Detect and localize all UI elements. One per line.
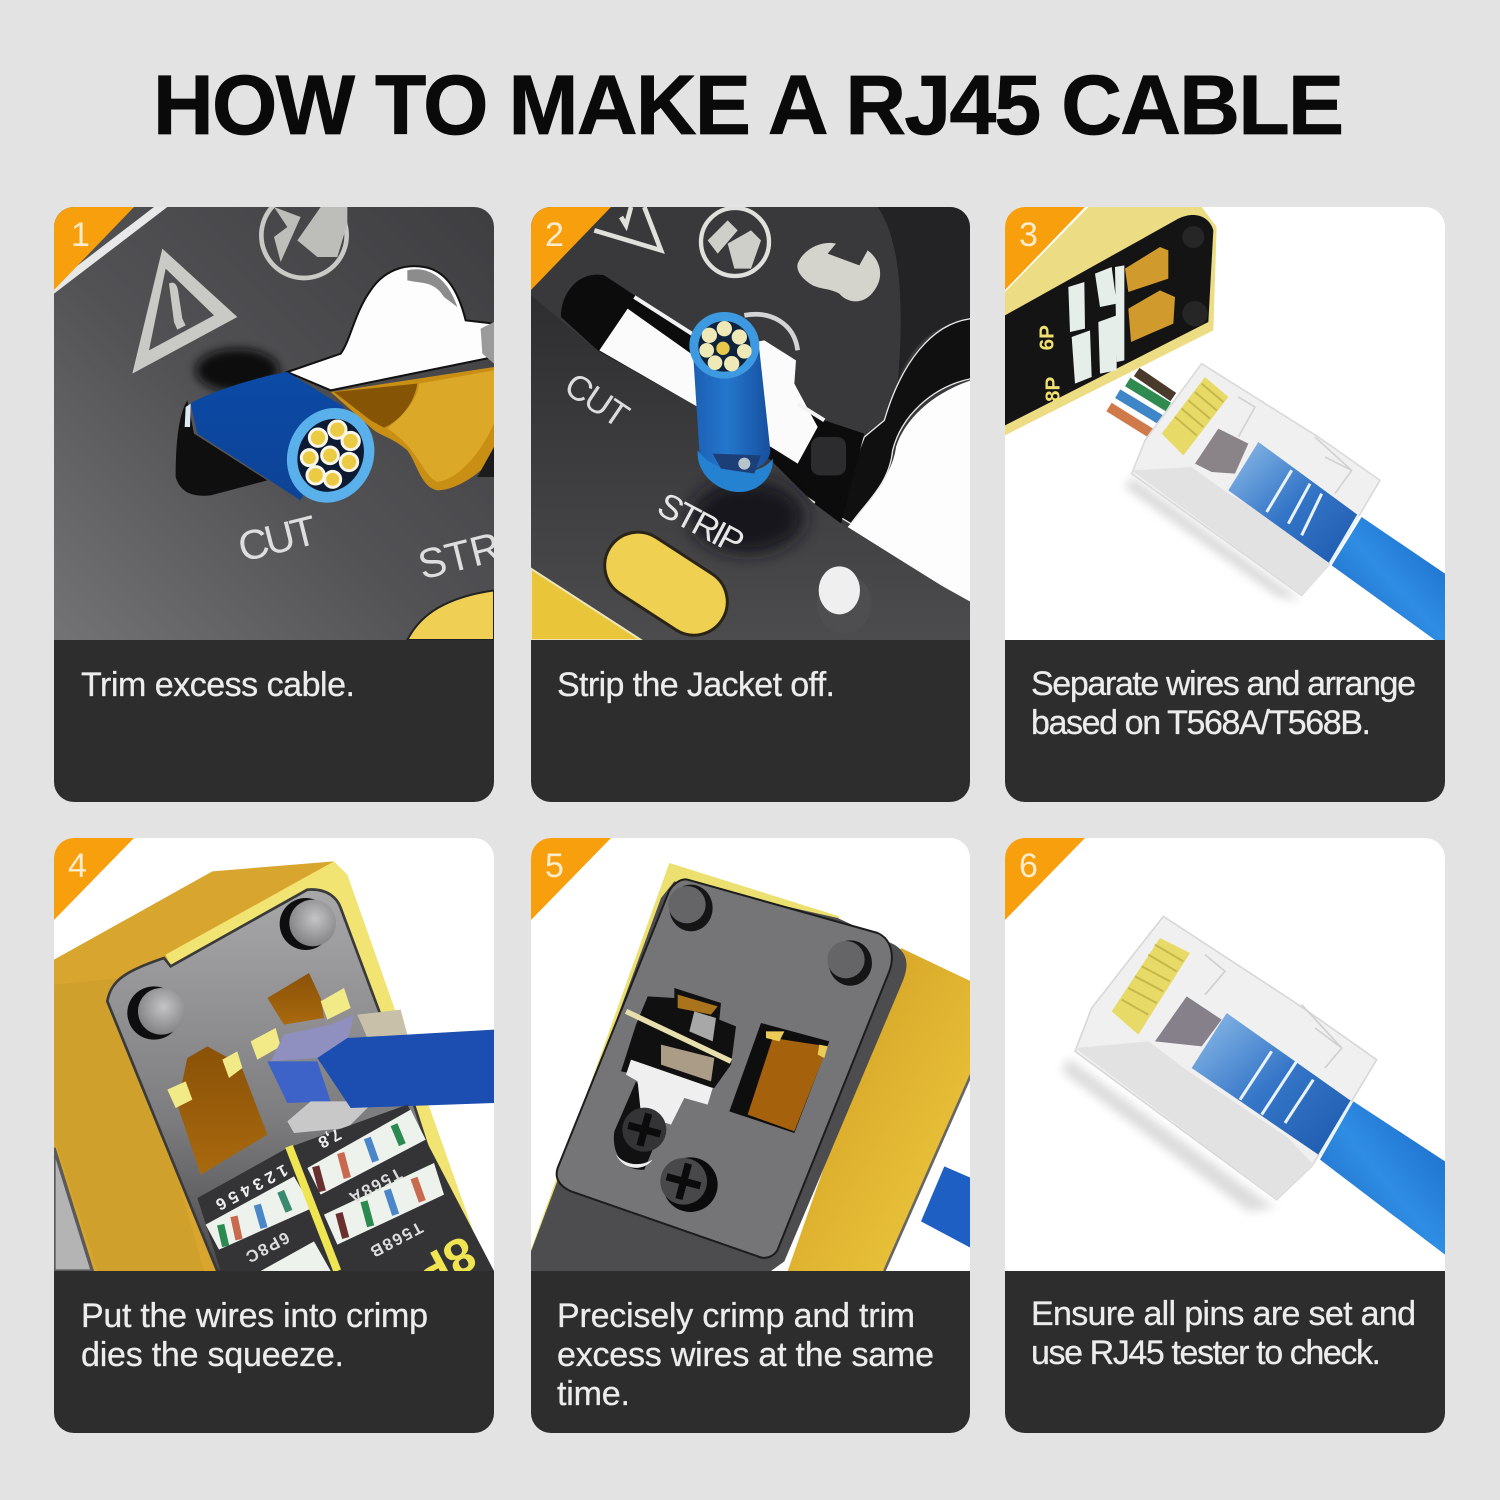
white interior: [599, 309, 818, 464]
window ribs: [1240, 1051, 1352, 1155]
trimmed wires: [626, 1011, 731, 1061]
die opening: [621, 988, 736, 1088]
slot: [614, 1081, 664, 1170]
orange number tag: [1005, 838, 1085, 920]
chart label 6P: 6P: [1035, 325, 1058, 350]
caption box: [531, 640, 970, 802]
chart label 8P: 8P: [405, 1225, 485, 1303]
number 5: 5: [545, 847, 564, 885]
number 4: 4: [68, 847, 87, 885]
grey faceplate: [107, 889, 467, 1271]
connector outlines: [1205, 955, 1342, 1068]
orange number tag: [54, 207, 134, 290]
under plate: [531, 881, 906, 1271]
caption box: [54, 640, 494, 802]
gold pins: [1112, 938, 1190, 1035]
caption text line 2: based on T568A/T568B.: [1031, 704, 1371, 742]
caption text: Ensure all pins are set and: [1031, 1295, 1416, 1333]
coloured wires: [1109, 372, 1173, 434]
jaw highlight: [387, 370, 494, 482]
cable glint: [185, 404, 191, 427]
chart label T568B: T568B: [367, 1218, 426, 1261]
right die brown: [748, 1038, 828, 1131]
tool head: [1005, 207, 1217, 435]
icon: warning triangle: [132, 249, 237, 374]
caption text: Trim excess cable.: [81, 666, 355, 704]
pale yellow edge: [166, 861, 487, 1271]
shadow under cable: [691, 480, 804, 554]
yellow body: [531, 569, 641, 640]
yellow button: [407, 590, 494, 640]
crimped contacts: [661, 1045, 714, 1081]
cable end inner: [297, 418, 364, 492]
chart label T568A: T568A: [346, 1164, 405, 1207]
blue cable: [921, 1166, 971, 1248]
die lower: [1128, 290, 1175, 342]
connector shadow: [1125, 477, 1302, 600]
window ribs: [1267, 470, 1358, 564]
blue cable: [191, 372, 344, 500]
die upper: [1125, 247, 1168, 292]
panel: step 2: [531, 207, 971, 802]
icon: warning triangle: [594, 207, 661, 250]
chrome pin: [481, 322, 494, 364]
photo: tool stripping jacket: [531, 207, 971, 648]
panel: step 1: [54, 207, 494, 802]
crumpled wires: [287, 1101, 374, 1133]
blue cable: [1320, 1101, 1445, 1255]
yellow jaw: [331, 367, 494, 490]
connector block: [689, 1011, 716, 1041]
blue window: [1228, 442, 1358, 564]
tool body: [54, 861, 477, 1271]
jaw shadow: [334, 384, 417, 428]
photo: tool cutting cable: [54, 193, 544, 640]
blue window: [1192, 1013, 1352, 1155]
label: CUT: CUT: [233, 506, 321, 571]
metal blade: [626, 1060, 713, 1125]
black slot: [561, 275, 864, 524]
caption text line 3: time.: [557, 1375, 630, 1413]
chart strips: [206, 1110, 444, 1271]
chrome curve: [744, 314, 798, 350]
right die tabs: [766, 1031, 828, 1058]
metal pin: [817, 566, 872, 634]
screw 1: [127, 986, 185, 1040]
stripped wires: [713, 454, 761, 474]
number 1: 1: [71, 216, 90, 254]
RJ45 connector: [1132, 364, 1380, 595]
caption text line 2: excess wires at the same: [557, 1336, 934, 1374]
lower plate: [531, 295, 971, 640]
caption text: Put the wires into crimp: [81, 1297, 428, 1335]
gold pins: [1162, 377, 1228, 455]
number 2: 2: [545, 216, 564, 254]
panel: step 6: [1005, 838, 1445, 1433]
caption box: [531, 1271, 970, 1433]
wire glint: [738, 458, 750, 470]
slot glint: [616, 1155, 653, 1168]
blue cable: [1332, 517, 1445, 640]
caption text: Precisely crimp and trim: [557, 1297, 915, 1335]
photo: wires arranged in connector: [1005, 207, 1445, 640]
icon: safety gloves: [261, 193, 347, 278]
body side shade: [54, 978, 204, 1271]
left die: [177, 1046, 267, 1175]
chart colour bars: [221, 1125, 422, 1246]
connector lower body: [1132, 467, 1330, 595]
chart label 6P8C: 6P8C: [243, 1228, 293, 1266]
screw 2: [827, 940, 872, 986]
cable end: [689, 312, 759, 379]
black handle swoosh: [834, 319, 971, 524]
right die: [267, 973, 324, 1025]
icon: safety gloves: [701, 208, 769, 276]
label: STRIP: STRIP: [413, 513, 544, 588]
dark jaw corner: [477, 447, 494, 477]
cable collar: [698, 450, 773, 492]
caption text line 2: use RJ45 tester to check.: [1031, 1334, 1381, 1372]
chart numbers 7,8: 7,8: [315, 1124, 344, 1152]
grey faceplate: [557, 879, 892, 1258]
connector shadow: [1062, 1058, 1275, 1211]
pale yellow body: [531, 863, 839, 1271]
connector in die: [357, 1010, 407, 1038]
die tab 4: [251, 1028, 281, 1060]
icon: safety goggles: [797, 243, 880, 301]
panel: step 3: [1005, 207, 1445, 802]
photo: finished connector: [1005, 838, 1445, 1271]
die tab 3: [321, 988, 351, 1020]
photo: crimping and trimming: [531, 838, 971, 1271]
orange number tag: [531, 838, 611, 920]
wires inside: [1195, 429, 1248, 474]
photo: wires in crimp dies: [54, 838, 494, 1303]
caption box: [1005, 1271, 1445, 1433]
panel: step 4: [54, 838, 494, 1433]
number 3: 3: [1019, 216, 1038, 254]
blue cable: [693, 340, 770, 472]
connector outlines: [1238, 397, 1352, 494]
outer corner: [878, 207, 971, 384]
caption box: [1005, 640, 1445, 802]
white background: [848, 380, 971, 604]
connector lower body: [1075, 1041, 1313, 1200]
orange number tag: [1005, 207, 1085, 290]
caption box: [54, 1271, 494, 1433]
conductors: [301, 421, 359, 487]
chrome highlights: [407, 269, 457, 307]
screw head 1: [622, 1108, 666, 1152]
inner wires: [271, 1015, 354, 1061]
side edge: [884, 1075, 971, 1271]
screw head 2: [660, 1157, 718, 1212]
cable shadow: [196, 349, 279, 392]
caption text: Separate wires and arrange: [1031, 665, 1416, 703]
bottom left rail: [54, 1148, 92, 1271]
white cutout: [287, 266, 494, 390]
cable end inner: [698, 321, 750, 372]
screws: [1182, 226, 1208, 326]
yellow button: [592, 519, 740, 648]
chart numbers 1-6: 1 2 3 4 5 6: [213, 1160, 291, 1214]
chart panel: [197, 1105, 494, 1271]
orange number tag: [531, 207, 611, 290]
RJ45 connector: [1075, 916, 1377, 1200]
caption text line 2: dies the squeeze.: [81, 1336, 344, 1374]
right die opening: [729, 1023, 829, 1133]
caption text: Strip the Jacket off.: [557, 666, 835, 704]
dark hole: [176, 400, 267, 496]
dark die pocket: [811, 437, 846, 475]
number 6: 6: [1019, 847, 1038, 885]
label: CUT: CUT: [558, 365, 636, 436]
chart divider: [289, 1146, 337, 1271]
gold die: [678, 995, 718, 1015]
exclamation mark: [169, 283, 186, 330]
gold side: [788, 948, 971, 1271]
conductors: [699, 321, 752, 371]
screw 2: [280, 898, 336, 950]
title: HOW TO MAKE A RJ45 CABLE: [153, 58, 1344, 152]
cable end: [286, 408, 374, 503]
screw 1: [668, 885, 713, 931]
slot rail: [634, 297, 824, 504]
black plate: [1005, 215, 1213, 425]
die tab 1: [167, 1081, 192, 1108]
orange number tag: [54, 838, 134, 920]
chart label 8P: 8P: [1041, 377, 1064, 402]
blue cable: [317, 1030, 494, 1108]
label: STRIP: STRIP: [651, 485, 750, 563]
wiring chart: [1068, 265, 1124, 384]
wires inside: [1155, 996, 1222, 1046]
die tab 2: [222, 1051, 242, 1078]
panel: step 5: [531, 838, 971, 1433]
cable stub: [267, 1061, 331, 1103]
